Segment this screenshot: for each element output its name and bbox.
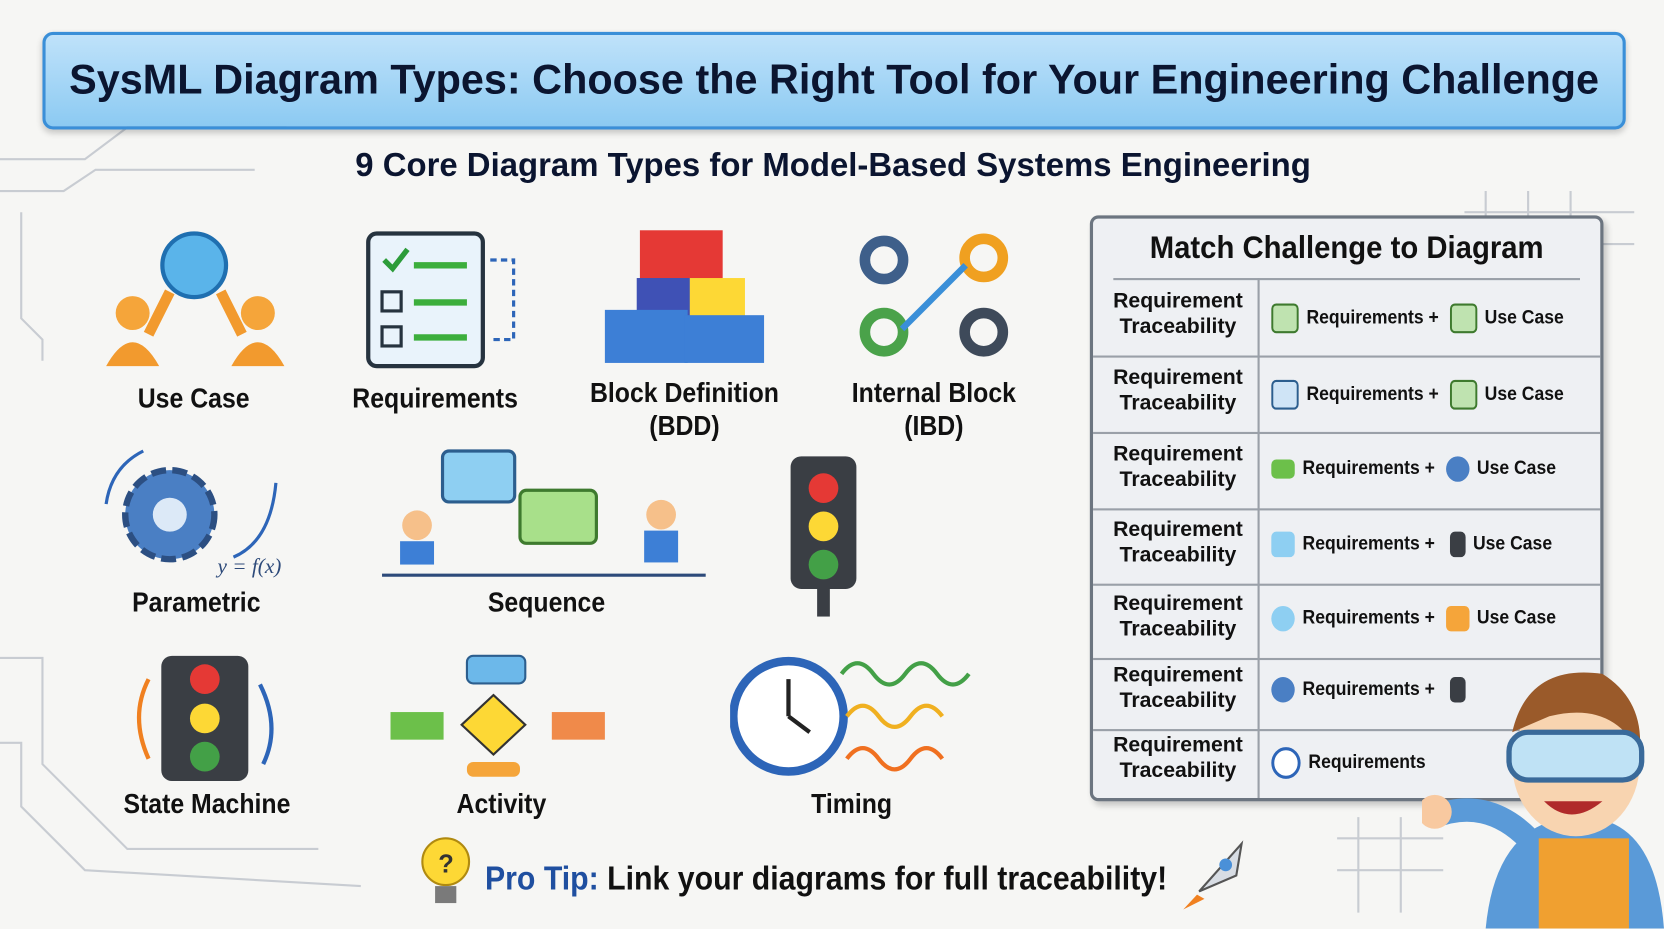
tip text: Pro Tip: Link your diagrams for full traceability! [485,860,1167,897]
text: Block Definition [590,377,779,409]
title banner [42,32,1626,129]
table rows: Requirements + Use Case [1303,607,1556,628]
text: Internal Block [852,377,1016,409]
icon: rocket [1183,840,1244,910]
icon: timing [730,656,970,776]
icon: lightbulb [421,837,470,904]
text: (BDD) [649,410,720,441]
table rows: Requirement Traceability [1113,518,1243,567]
text: Activity [457,787,546,819]
table rows: Requirements + Use Case [1303,457,1556,478]
icon: requirements [366,231,516,368]
icon: state machine [136,656,274,781]
table rows: Requirements + Use Case [1306,306,1564,328]
panel: match challenge to diagram [1090,215,1603,801]
table rows [1093,290,1600,782]
icon: parametric [104,450,281,578]
text: Timing [811,787,892,819]
icon: traffic light [790,456,856,617]
pro tip [421,837,1244,910]
table rows: Requirement Traceability [1113,592,1243,641]
text: Requirements [352,382,518,414]
table rows: Requirement Traceability [1113,733,1243,782]
table rows: Requirements [1308,751,1426,772]
text: (IBD) [904,410,964,441]
table rows: Requirements + Use Case [1303,532,1552,554]
table rows: Requirement Traceability [1113,443,1243,491]
table rows: Requirement Traceability [1113,366,1243,415]
icon: activity [390,654,605,777]
panel heading: Match Challenge to Diagram [1150,230,1544,265]
icon: lightbulb: ? [438,850,454,878]
text: Sequence [488,586,605,618]
icon: sequence [382,449,706,577]
table rows: Requirements + Use Case [1306,383,1564,404]
icon: block definition [604,230,764,363]
table rows: Requirement Traceability [1113,290,1243,339]
panel heading [1113,219,1580,280]
icon: internal block [860,234,1008,357]
text: State Machine [123,787,290,819]
subtitle: 9 Core Diagram Types for Model-Based Systems Engineering [355,146,1311,184]
icon: parametric: y = f(x) [216,554,281,578]
engineer character [1422,672,1664,928]
text: Use Case [138,382,250,414]
icon: use case [106,231,284,366]
title banner: SysML Diagram Types: Choose the Right Tool for Your Engineering Challenge [69,57,1599,103]
text: Parametric [132,586,261,618]
table rows: Requirements + [1303,678,1435,699]
table rows: Requirement Traceability [1113,663,1243,712]
